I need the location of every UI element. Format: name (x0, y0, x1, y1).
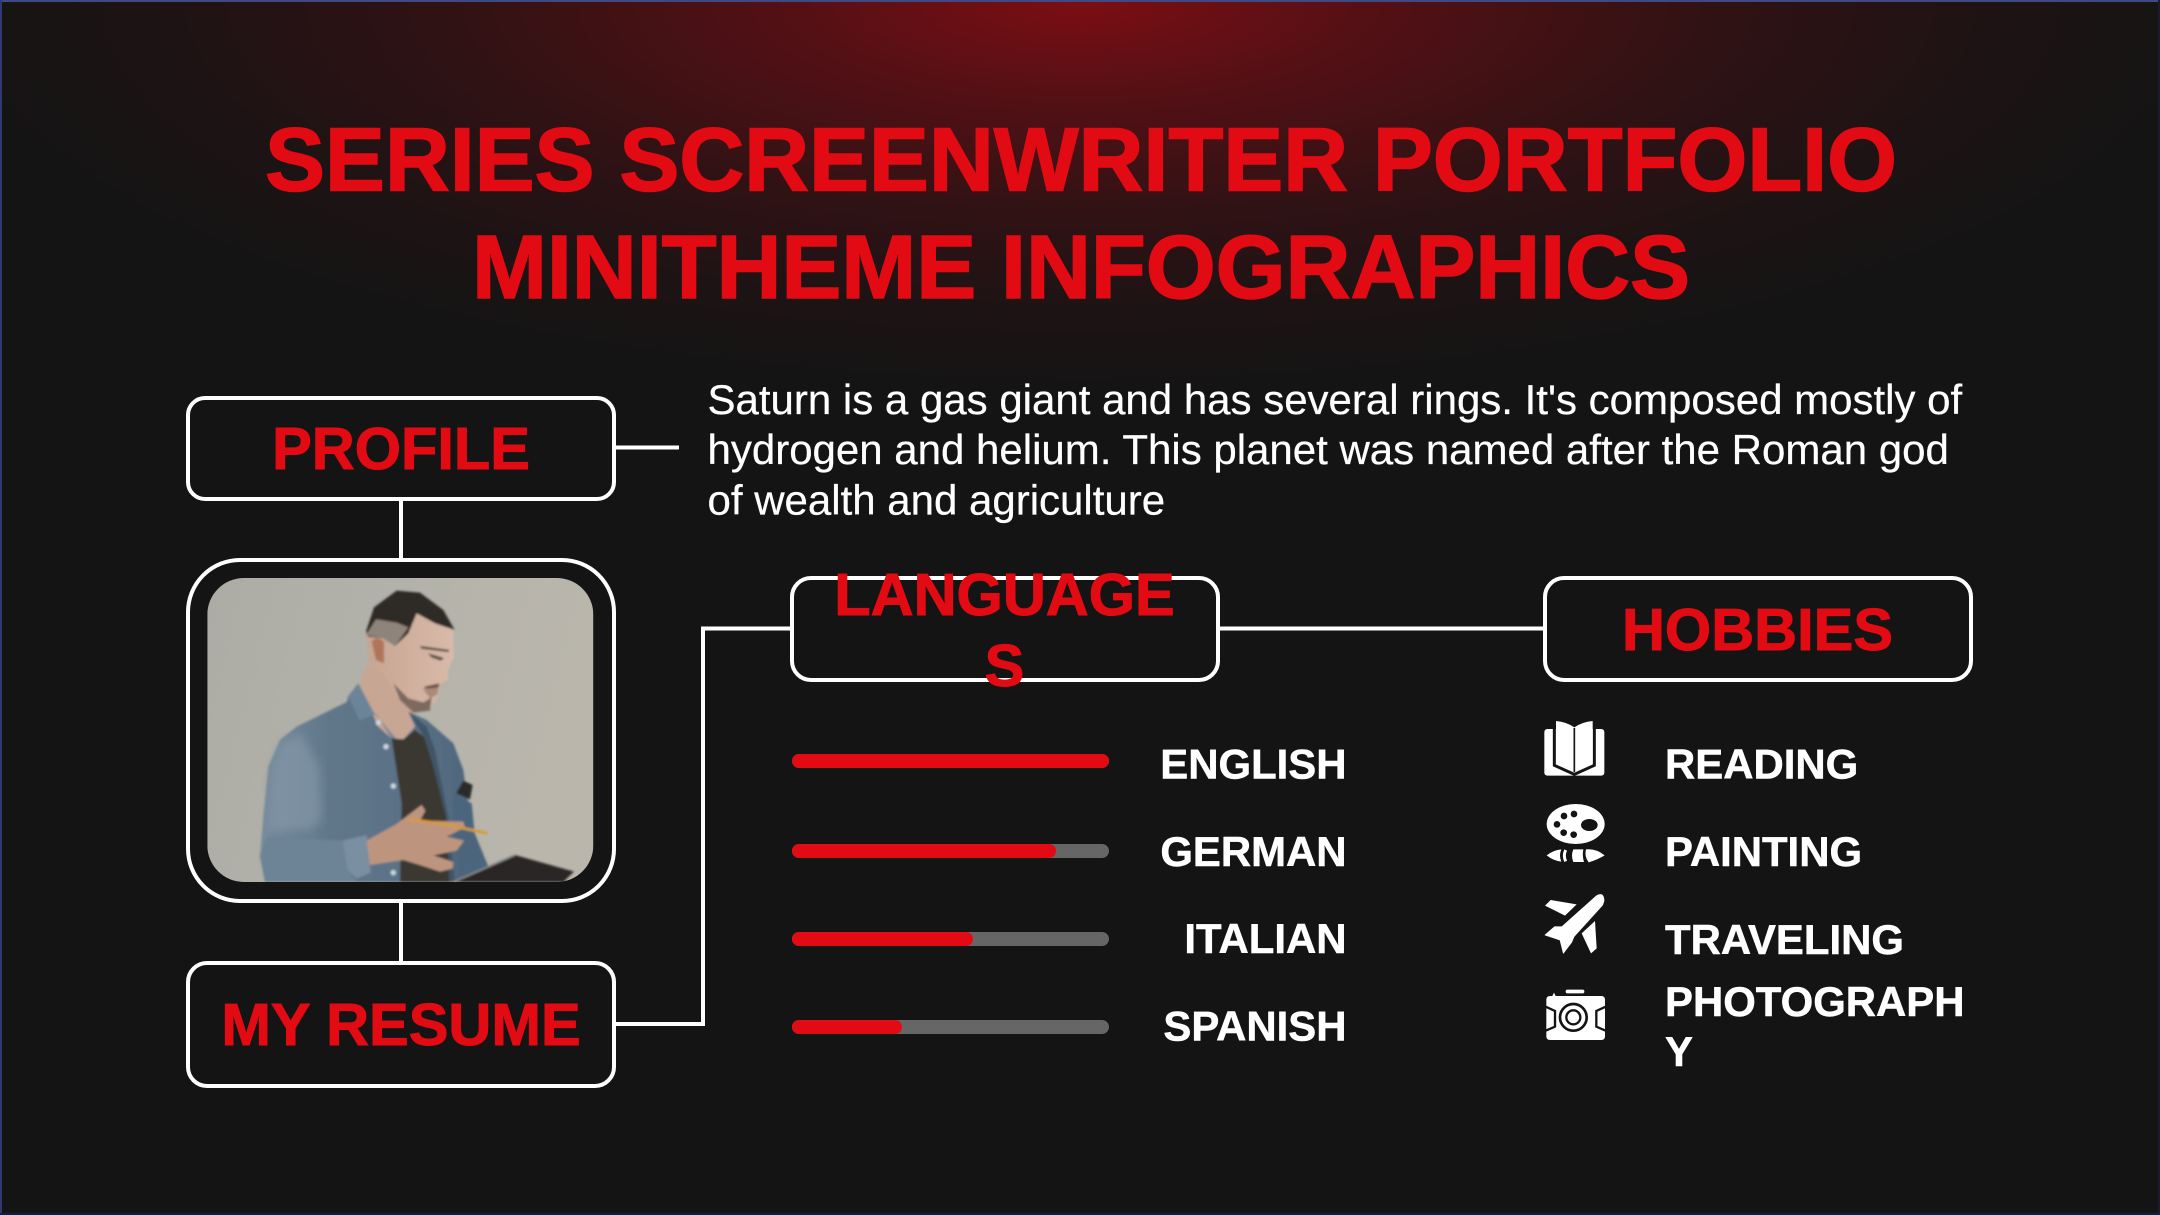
cuff (262, 840, 355, 882)
label: reading: READING (1665, 740, 1858, 788)
bar: english: ENGLISH (1160, 740, 1346, 788)
description text: of wealth and agriculture (708, 476, 1165, 524)
panel: hobbies heading: HOBBIES (1622, 596, 1893, 663)
phone in pocket (456, 781, 473, 799)
photo: man in denim shirt (207, 578, 593, 882)
panel: hobbies heading (1545, 578, 1971, 680)
panel: my resume heading: MY RESUME (221, 991, 581, 1058)
bar: german (792, 828, 1346, 875)
icon: airplane (1545, 894, 1604, 953)
bar: english (792, 740, 1346, 788)
hobbies list (1544, 721, 1964, 1075)
icon: camera (1546, 990, 1606, 1040)
panel: languages heading: LANGUAGE (834, 561, 1175, 628)
label: photography: PHOTOGRAPH (1665, 978, 1964, 1025)
panel: profile heading: PROFILE (272, 415, 530, 482)
bar: italian (792, 915, 1346, 962)
sleeve highlight (268, 733, 322, 830)
icon: palette and brush (1547, 804, 1605, 862)
panel: languages heading: S (985, 632, 1024, 699)
title: SERIES SCREENWRITER PORTFOLIO (265, 110, 1897, 210)
icon: book (1544, 721, 1604, 776)
title (265, 110, 1897, 318)
shirt (260, 683, 488, 882)
bar chart: language skills (792, 740, 1346, 1050)
description text (708, 376, 1962, 524)
title: MINITHEME INFOGRAPHICS (472, 218, 1690, 318)
panel: photo frame (188, 560, 614, 901)
clipboard (453, 855, 574, 882)
label: painting: PAINTING (1665, 828, 1862, 875)
description text: hydrogen and helium. This planet was named after the Roman god (708, 426, 1949, 473)
panel: my resume heading (188, 963, 614, 1086)
man's neck and face (359, 663, 417, 739)
buttons (376, 720, 381, 725)
panel: languages heading (792, 561, 1218, 699)
bar: italian: ITALIAN (1184, 915, 1346, 962)
bar: german: GERMAN (1160, 828, 1346, 875)
t-shirt (392, 730, 449, 882)
label: photography (1665, 978, 1964, 1075)
description text: Saturn is a gas giant and has several rings. It's composed mostly of (708, 376, 1962, 423)
label: photography: Y (1665, 1028, 1693, 1075)
connector lines (401, 448, 1544, 1024)
bar: spanish (792, 1002, 1346, 1050)
pencil (408, 819, 487, 833)
panel: profile heading (188, 398, 614, 499)
label: traveling: TRAVELING (1665, 916, 1904, 963)
bar: spanish: SPANISH (1163, 1002, 1346, 1050)
hand (367, 805, 465, 872)
